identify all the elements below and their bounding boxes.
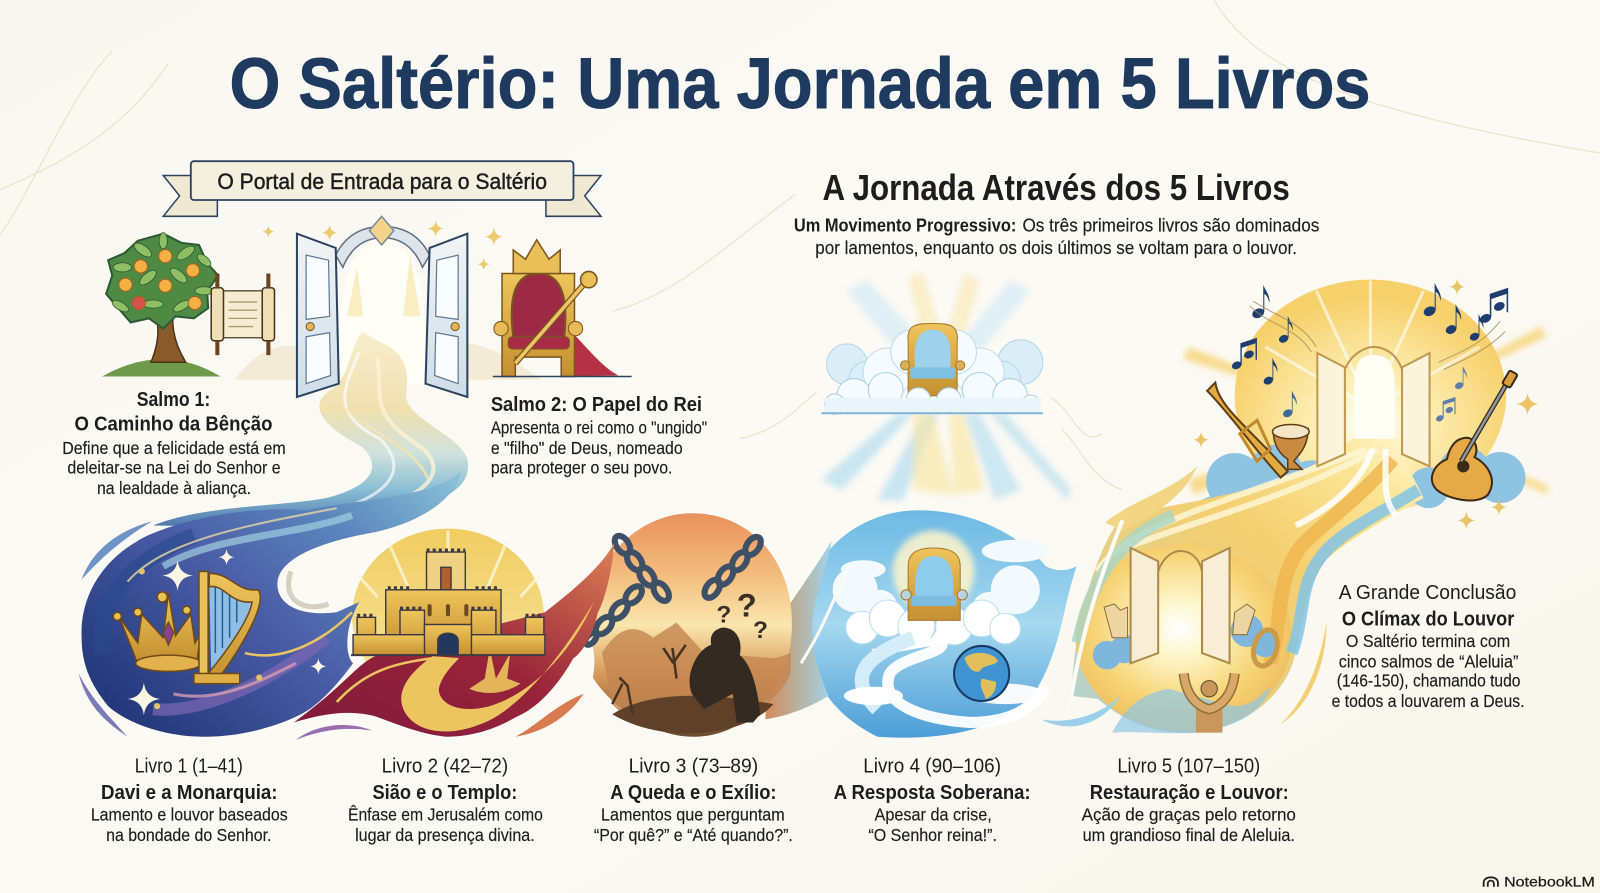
ribbon edge accents	[289, 520, 1122, 714]
icon: broken chains	[583, 533, 764, 647]
text: Livro 2: lugar da presença divina.	[355, 825, 535, 845]
panel: Livro 3 to 4 ribbon	[765, 541, 832, 719]
icon: question marks: ?	[753, 617, 768, 644]
text: A Grande Conclusão: O Saltério termina com	[1346, 631, 1510, 651]
text: Livro 1: Livro 1 (1–41)	[135, 755, 243, 777]
icon: scroll	[211, 273, 274, 355]
icon: harp	[194, 571, 260, 684]
icon: globe	[954, 646, 1009, 701]
panel: Livro 4 water and clouds	[806, 510, 1077, 738]
icon: question marks	[716, 586, 768, 644]
text: Salmo 1: na lealdade à aliança.	[97, 478, 251, 498]
text: Livro 3: A Queda e o Exílio:	[610, 782, 777, 804]
sparkles around final portal	[1193, 279, 1539, 530]
text: A Grande Conclusão: cinco salmos de “Aleluia”	[1339, 651, 1519, 671]
text: Salmo 1: Define que a felicidade está em	[62, 438, 286, 458]
heading: journey	[794, 168, 1319, 258]
text: A Grande Conclusão	[1332, 582, 1524, 711]
text: A Grande Conclusão: O Clímax do Louvor	[1342, 609, 1514, 631]
icon: Livro 4 throne	[893, 531, 974, 620]
title: O Saltério: Uma Jornada em 5 Livros	[230, 44, 1370, 124]
icon: royal throne	[493, 240, 632, 377]
icon: Livro 5 doors	[1131, 548, 1230, 663]
text: Livro 4	[834, 755, 1031, 845]
text: A Grande Conclusão: e todos a louvarem a Deus.	[1332, 691, 1524, 711]
icon: castle	[351, 550, 545, 655]
text: Livro 1: Davi e a Monarquia:	[101, 782, 278, 804]
icon: mourning figure	[690, 628, 760, 722]
text: Salmo 1: O Caminho da Bênção	[74, 414, 272, 436]
heading: journey: Os três primeiros livros são dominados	[1022, 215, 1319, 236]
icon: question marks: ?	[716, 601, 731, 628]
river from the portal	[153, 332, 468, 529]
text: Livro 3: Lamentos que perguntam	[601, 804, 785, 824]
text: Salmo 1: Salmo 1:	[137, 389, 210, 411]
text: Livro 4: Apesar da crise,	[874, 804, 992, 824]
heading: journey: por lamentos, enquanto os dois últimos se voltam para o louvor.	[815, 237, 1297, 258]
text: Salmo 2: e "filho" de Deus, nomeado	[491, 438, 683, 458]
panel: Livro 2 sun	[352, 529, 544, 704]
accent flakes around ribbons	[79, 521, 1327, 740]
text: Livro 2	[348, 755, 543, 845]
icon: open portal door	[262, 216, 503, 397]
NotebookLM logo: NotebookLM	[1504, 875, 1595, 891]
icon: guitar	[1432, 370, 1518, 500]
heading: journey: Um Movimento Progressivo:	[794, 215, 1016, 236]
text: Salmo 2: Salmo 2: O Papel do Rei	[491, 394, 702, 416]
text: Livro 1: na bondade do Senhor.	[106, 825, 271, 845]
text: Livro 2: Sião e o Templo:	[372, 782, 517, 804]
text: Salmo 2	[491, 394, 707, 477]
text: Livro 1	[91, 755, 288, 845]
icon: tree of blessing	[102, 233, 220, 377]
text: Salmo 1: deleitar-se na Lei do Senhor e	[67, 457, 281, 477]
icon: musical notes	[1231, 283, 1508, 423]
text: Livro 2: Livro 2 (42–72)	[382, 755, 508, 777]
text: Livro 5: Restauração e Louvor:	[1090, 782, 1289, 804]
text: Livro 2: Ênfase em Jerusalém como	[348, 804, 543, 824]
text: Salmo 2: para proteger o seu povo.	[491, 457, 672, 477]
heading: journey: A Jornada Através dos 5 Livros	[822, 168, 1290, 208]
panel: Livro 3 scene	[589, 513, 792, 737]
text: A Grande Conclusão: (146-150), chamando tudo	[1337, 671, 1520, 691]
icon: trumpet	[1207, 383, 1288, 478]
panel: Livro 2 crimson ribbon	[294, 543, 614, 737]
text: Livro 4: Livro 4 (90–106)	[863, 755, 1001, 777]
panel: final portal glow and clouds	[1164, 280, 1549, 522]
text: Salmo 1	[62, 389, 286, 498]
icon: question marks: ?	[737, 586, 757, 623]
icon: final portal doors	[1317, 347, 1430, 466]
text: Livro 5: Livro 5 (107–150)	[1117, 755, 1260, 777]
text: Livro 5: um grandioso final de Aleluia.	[1083, 825, 1295, 845]
text: Salmo 2: Apresenta o rei como o "ungido"	[491, 418, 707, 438]
text: Livro 4: “O Senhor reina!”.	[868, 825, 997, 845]
panel: Livro 1 ribbon	[82, 471, 461, 737]
text: Livro 3	[594, 755, 793, 845]
text: Livro 1: Lamento e louvor baseados	[91, 804, 288, 824]
text: Livro 5	[1082, 755, 1296, 845]
banner: portal heading: O Portal de Entrada para o Saltério	[217, 169, 547, 194]
staff lines near the notes	[1250, 301, 1505, 369]
icon: throne on clouds with rays	[821, 273, 1071, 500]
text: A Grande Conclusão: A Grande Conclusão	[1339, 582, 1516, 604]
banner: portal heading	[163, 161, 601, 216]
icon: Livro 5 raised hands and figure	[1104, 604, 1281, 733]
panel: Livro 5 flow and stream to final portal	[1071, 439, 1423, 733]
icon: hillside behind portal	[235, 342, 541, 380]
text: Livro 3: Livro 3 (73–89)	[629, 755, 758, 777]
text: Livro 5: Ação de graças pelo retorno	[1082, 804, 1296, 824]
text: Livro 4: A Resposta Soberana:	[834, 782, 1031, 804]
icon: drum	[1272, 424, 1309, 469]
portal interior glow	[339, 237, 426, 384]
icon: crown	[113, 592, 201, 671]
text: Livro 3: “Por quê?” e “Até quando?”.	[594, 825, 793, 845]
